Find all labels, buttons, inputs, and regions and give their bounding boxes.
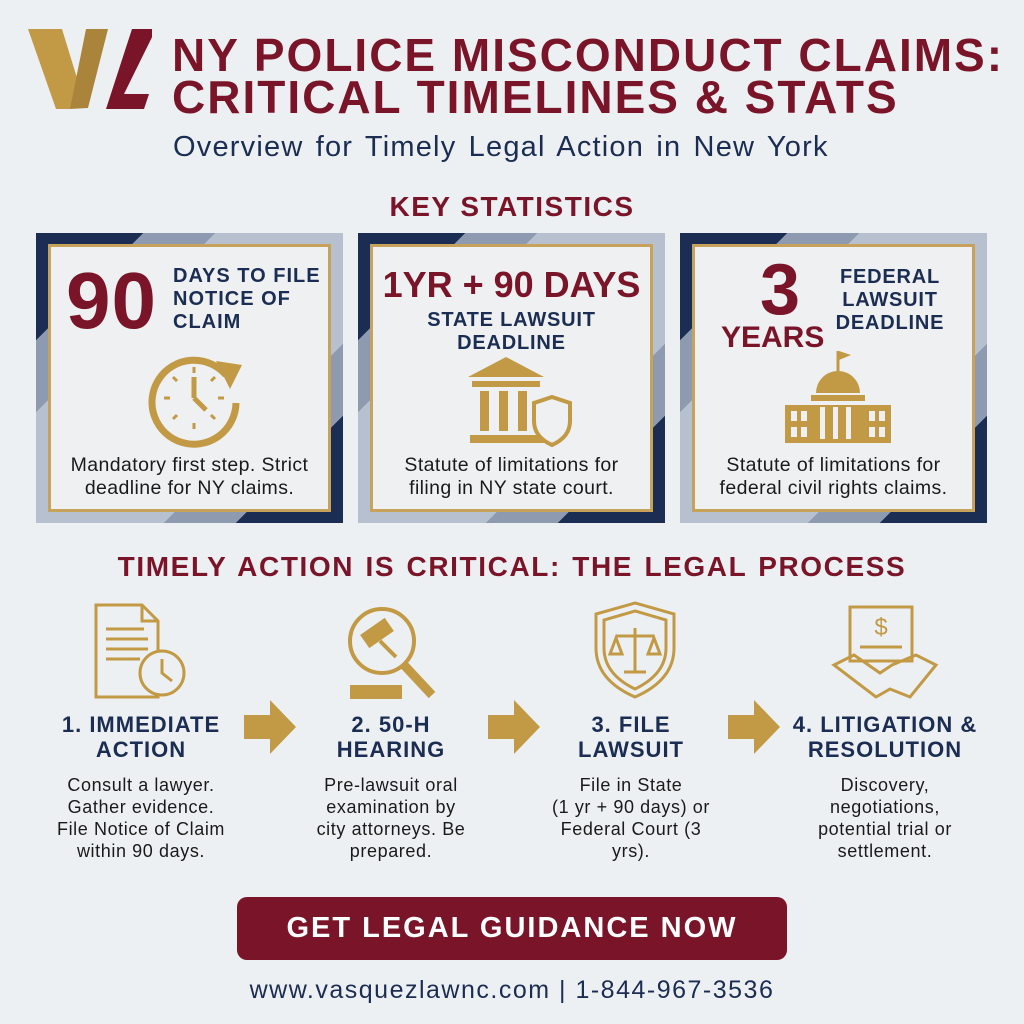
stat label: DEADLINE <box>836 312 944 334</box>
stat label <box>173 265 321 333</box>
stat label: DAYS TO FILE <box>173 265 321 287</box>
step 3: yrs). <box>612 841 650 861</box>
step 2: city attorneys. Be <box>317 819 465 839</box>
description: filing in NY state court. <box>409 477 614 499</box>
stat number 90: 90 <box>66 256 157 345</box>
stat label: LAWSUIT <box>842 289 938 311</box>
CTA button <box>237 897 787 960</box>
step 1: within 90 days. <box>77 841 205 861</box>
icon: clock <box>148 356 242 448</box>
stat label: FEDERAL <box>840 266 940 288</box>
step 4: settlement. <box>838 841 932 861</box>
step 3: File in State <box>580 775 682 795</box>
step 1: Consult a lawyer. <box>67 775 215 795</box>
step 1: ACTION <box>96 737 186 762</box>
step 3: Federal Court (3 <box>561 819 701 839</box>
arrow 1 <box>244 700 296 754</box>
stat label: DEADLINE <box>457 332 566 354</box>
step 2: prepared. <box>350 841 432 861</box>
icon: gavel magnifier <box>348 607 436 699</box>
stat number: 3 <box>760 250 800 330</box>
icon: contract handshake: $ <box>874 614 888 641</box>
heading: legal process: TIMELY ACTION IS CRITICAL: THE LEGAL PROCESS <box>118 551 906 582</box>
step 4 <box>793 712 977 861</box>
description <box>720 454 947 499</box>
step 1: 1. IMMEDIATE <box>62 712 220 737</box>
description: federal civil rights claims. <box>720 477 947 499</box>
description: Mandatory first step. Strict <box>71 454 308 476</box>
step 1 <box>57 712 225 861</box>
step 2: Pre-lawsuit oral <box>324 775 458 795</box>
stat label: STATE LAWSUIT <box>427 309 596 331</box>
step 4: Discovery, <box>841 775 929 795</box>
arrow 3 <box>728 700 780 754</box>
step 3 <box>552 712 710 861</box>
step 3: LAWSUIT <box>578 737 684 762</box>
stat unit: YEARS <box>721 321 824 354</box>
icon: courthouse shield <box>468 357 572 448</box>
stat label: CLAIM <box>173 311 241 333</box>
panel: 1yr + 90 days <box>358 233 665 523</box>
footer contact: www.vasquezlawnc.com | 1-844-967-3536 <box>250 976 774 1004</box>
step 2: HEARING <box>337 737 445 762</box>
step 2 <box>317 712 465 861</box>
step 1: Gather evidence. <box>68 797 214 817</box>
description: Statute of limitations for <box>404 454 619 476</box>
step 2: 2. 50-H <box>351 712 431 737</box>
icon: document clock <box>94 604 186 698</box>
arrow 2 <box>488 700 540 754</box>
stat label <box>427 309 596 354</box>
icon: shield scales <box>594 602 676 699</box>
logo <box>28 29 152 109</box>
panel: 90 days <box>36 233 343 523</box>
description <box>71 454 308 499</box>
step 4: negotiations, <box>830 797 940 817</box>
step 3: (1 yr + 90 days) or <box>552 797 710 817</box>
stat label <box>836 266 944 334</box>
panel: 3 years <box>680 233 987 523</box>
icon: capitol <box>785 351 891 443</box>
title <box>172 29 1004 123</box>
step 4: 4. LITIGATION & <box>793 712 977 737</box>
icon: contract handshake <box>831 606 938 699</box>
title: CRITICAL TIMELINES & STATS <box>172 71 899 123</box>
CTA button: GET LEGAL GUIDANCE NOW <box>286 912 738 944</box>
stat number: 1YR + 90 DAYS <box>383 264 640 305</box>
step 4: potential trial or <box>818 819 952 839</box>
title: NY POLICE MISCONDUCT CLAIMS: <box>172 29 1004 81</box>
description: deadline for NY claims. <box>85 477 294 499</box>
description <box>404 454 619 499</box>
step 3: 3. FILE <box>591 712 671 737</box>
stat label: NOTICE OF <box>173 288 291 310</box>
step 1: File Notice of Claim <box>57 819 225 839</box>
step 2: examination by <box>326 797 456 817</box>
description: Statute of limitations for <box>726 454 941 476</box>
step 4: RESOLUTION <box>808 737 962 762</box>
subtitle: Overview for Timely Legal Action in New York <box>173 131 829 163</box>
heading: key statistics: KEY STATISTICS <box>389 191 635 222</box>
